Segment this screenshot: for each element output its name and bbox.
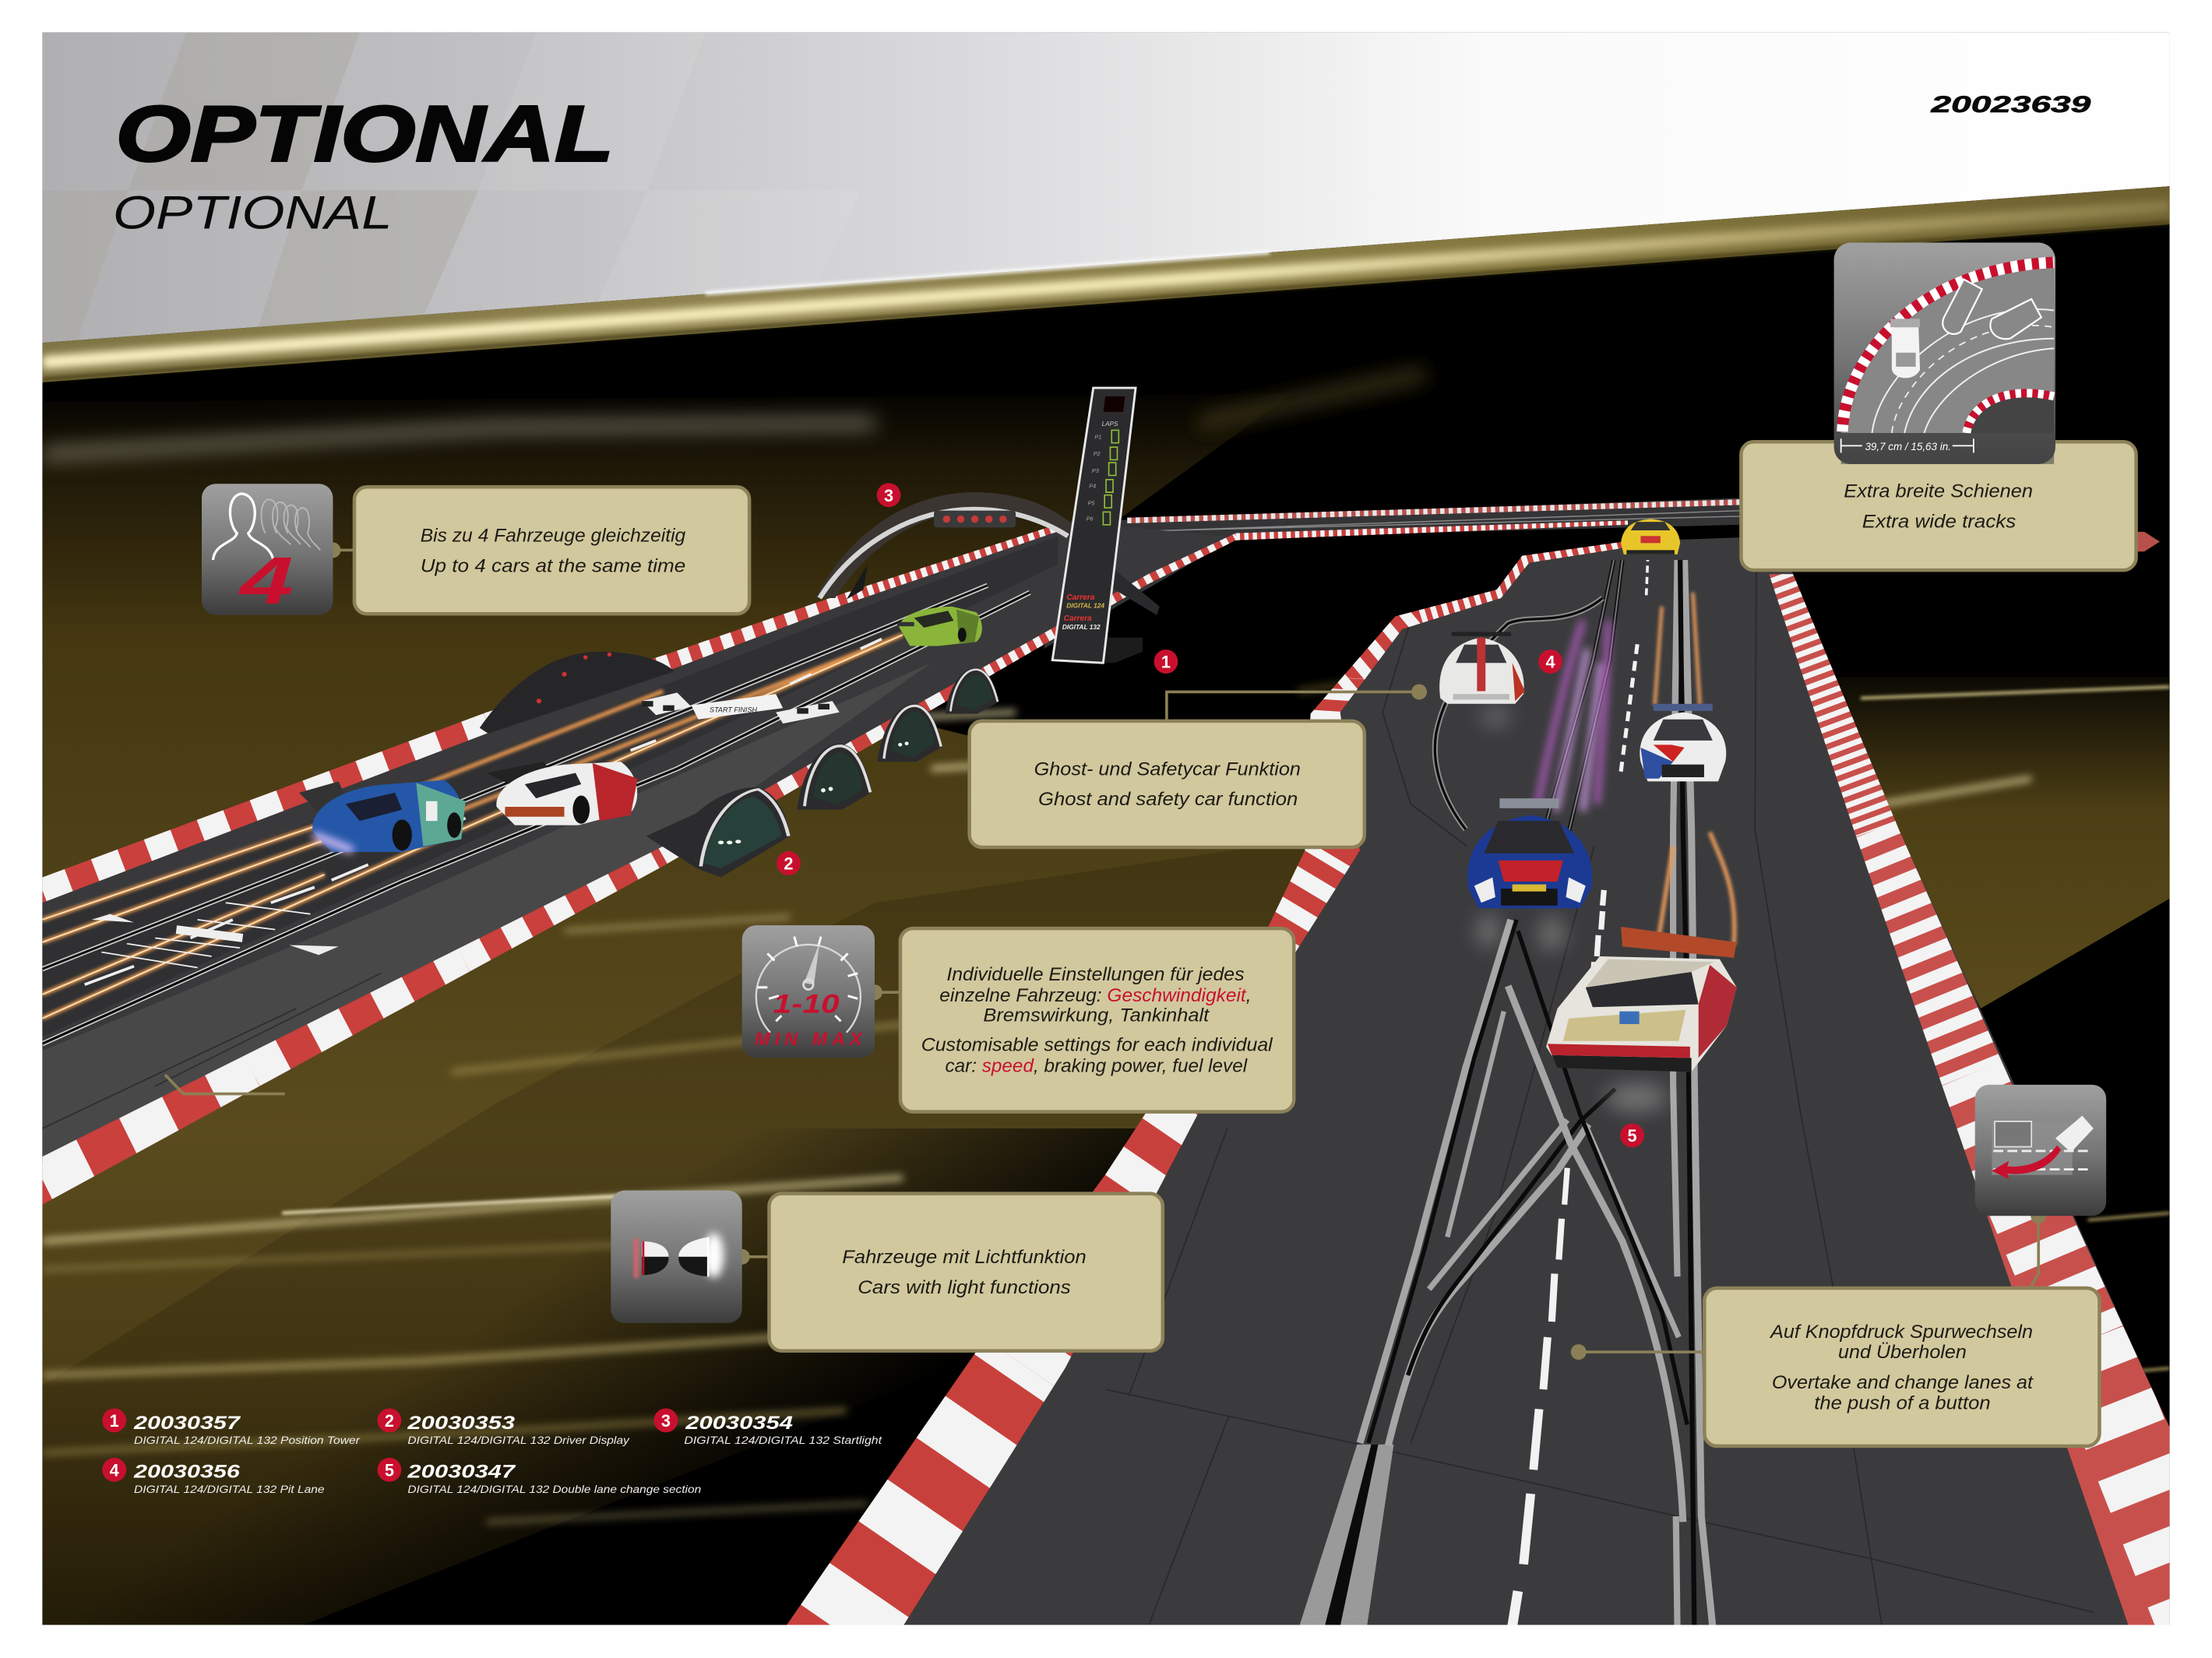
number badges — [777, 483, 1644, 1147]
legend item 4: 20030356 — [133, 1461, 240, 1482]
position tower: P3 — [1092, 467, 1099, 474]
legend item 4 — [102, 1458, 325, 1495]
right track right kerb — [1749, 564, 2201, 1636]
legend: part numbers — [102, 1409, 882, 1495]
icon: wide tracks: 39,7 cm / 15,63 in. — [1865, 441, 1951, 452]
car: red white — [487, 762, 638, 825]
bronze background right — [1819, 677, 2170, 1009]
icon: gauge: 1-10 — [773, 989, 840, 1019]
legend item 1 — [102, 1409, 361, 1446]
callout: up to 4 cars: Up to 4 cars at the same time — [421, 555, 685, 576]
car: yellow — [1621, 519, 1680, 554]
callout: individual settings: Customisable settings for each individual — [921, 1034, 1273, 1055]
icon: wide tracks — [1834, 243, 2055, 464]
car: ferrari — [1546, 927, 1737, 1072]
white direction arrows — [92, 914, 339, 955]
icon: lane change — [1975, 1085, 2106, 1216]
callout: extra wide tracks — [1741, 442, 2136, 570]
callout: lane change: Auf Knopfdruck Spurwechseln — [1769, 1322, 2033, 1343]
car: blue audi — [1467, 798, 1592, 908]
display 1 — [646, 787, 790, 878]
connector: gauge icon — [867, 984, 900, 1000]
icon: four drivers: 4 — [238, 544, 294, 618]
legend item 3: 3 — [661, 1411, 671, 1431]
badge 4 — [1538, 649, 1562, 674]
icon: gauge: MIN MAX — [755, 1029, 863, 1049]
dark arch — [480, 652, 675, 734]
right track surface — [903, 536, 2170, 1626]
callout: individual settings: Bremswirkung, Tankinhalt — [983, 1005, 1210, 1026]
callout: lane change: the push of a button — [1814, 1392, 1991, 1413]
display 4 — [946, 668, 999, 713]
callout: lane change — [1704, 1288, 2099, 1446]
position tower: P1 — [1095, 433, 1101, 440]
chequered start finish line: START FINISH — [710, 706, 757, 714]
subtitle: OPTIONAL — [113, 185, 393, 238]
connector: ghost callout — [1167, 684, 1427, 720]
callout: lane change: und Überholen — [1838, 1342, 1967, 1363]
car: blue renault — [299, 780, 466, 852]
legend item 3 — [654, 1409, 882, 1446]
connector: lane change section — [1571, 1344, 1704, 1360]
position tower: Carrera — [1064, 614, 1092, 623]
legend item 4: DIGITAL 124/DIGITAL 132 Pit Lane — [134, 1484, 325, 1495]
icon: lights — [611, 1191, 742, 1323]
legend item 2: 2 — [385, 1411, 394, 1431]
driver displays — [646, 668, 999, 878]
bronze background left — [42, 393, 1411, 1625]
callout: up to 4 cars — [354, 487, 749, 614]
badge 2: 2 — [784, 854, 794, 874]
car: green — [897, 607, 982, 646]
badge 5: 5 — [1628, 1126, 1637, 1146]
badge 1: 1 — [1161, 653, 1171, 672]
legend item 2: 20030353 — [407, 1413, 516, 1434]
left track surface — [42, 522, 1236, 1163]
car: white porsche — [1439, 632, 1525, 704]
position tower: P6 — [1087, 515, 1094, 522]
legend item 1: 20030357 — [133, 1413, 241, 1434]
callout: lane change: Overtake and change lanes at — [1772, 1372, 2034, 1393]
legend item 1: 1 — [110, 1411, 119, 1431]
position tower — [1052, 388, 1160, 663]
callout: light functions — [769, 1194, 1163, 1351]
callout: ghost and safety car — [970, 721, 1365, 847]
position tower: Carrera — [1066, 593, 1095, 602]
article number: 20023639 — [1930, 92, 2091, 118]
position tower: P2 — [1094, 450, 1101, 457]
left track lower kerb — [42, 520, 1628, 1204]
badge 3: 3 — [884, 486, 893, 505]
track lanes and lane change section — [1299, 560, 1713, 1626]
callout: up to 4 cars: Bis zu 4 Fahrzeuge gleichzeitig — [421, 526, 686, 547]
gold band — [42, 186, 2170, 382]
left track lane glow — [42, 635, 903, 1019]
legend item 2 — [378, 1409, 630, 1446]
icon: gauge — [742, 925, 875, 1058]
position tower: P5 — [1087, 499, 1095, 506]
callout: extra wide tracks: Extra breite Schienen — [1844, 481, 2033, 502]
title: OPTIONAL — [116, 90, 614, 178]
car light trails — [1537, 593, 1735, 945]
callout: ghost and safety car: Ghost- und Safetycar Funktion — [1034, 759, 1301, 780]
display 3 — [878, 704, 942, 762]
track glow spots — [1477, 708, 1668, 1111]
left track slots — [42, 586, 1030, 1044]
position tower: DIGITAL 132 — [1062, 623, 1101, 631]
legend item 3: 20030354 — [685, 1413, 793, 1434]
car: bmw — [1640, 704, 1726, 781]
connector: lane change icon — [2030, 1208, 2046, 1288]
callout: individual settings — [900, 928, 1294, 1112]
badge 4: 4 — [1545, 653, 1555, 672]
position tower: DIGITAL 124 — [1066, 602, 1104, 610]
legend item 3: DIGITAL 124/DIGITAL 132 Startlight — [684, 1434, 882, 1446]
position tower: P4 — [1089, 483, 1096, 490]
badge 3 — [877, 483, 900, 507]
display 2 — [797, 744, 872, 810]
callout: individual settings: car: speed, braking power, fuel level — [946, 1056, 1248, 1077]
callout: ghost and safety car: Ghost and safety car function — [1038, 789, 1298, 810]
legend item 4: 4 — [110, 1460, 119, 1480]
left stray connector — [165, 1075, 285, 1094]
legend item 5: 20030347 — [407, 1461, 516, 1482]
callout: individual settings: Individuelle Einstellungen für jedes — [946, 964, 1245, 985]
icon: four drivers — [202, 484, 333, 618]
header panel — [42, 33, 2170, 343]
startlight gantry — [815, 492, 1078, 600]
badge 1 — [1154, 649, 1178, 674]
legend item 5: 5 — [385, 1460, 394, 1480]
light streaks — [42, 374, 2170, 1522]
callout: extra wide tracks: Extra wide tracks — [1862, 511, 2016, 532]
centre line dashes — [1513, 560, 1648, 1626]
legend item 1: DIGITAL 124/DIGITAL 132 Position Tower — [134, 1434, 361, 1446]
callout: individual settings: einzelne Fahrzeug: Geschwindigkeit, — [939, 985, 1252, 1006]
legend item 5: DIGITAL 124/DIGITAL 132 Double lane change section — [407, 1484, 702, 1495]
left track upper kerb — [42, 528, 1056, 903]
callout: light functions: Cars with light functions — [858, 1277, 1071, 1298]
chequered start finish line — [642, 692, 840, 723]
far straight track — [1044, 498, 2160, 649]
connector: light icon — [734, 1249, 769, 1265]
connector: people icon to callout — [325, 542, 354, 558]
position tower: LAPS — [1102, 421, 1118, 428]
legend item 2: DIGITAL 124/DIGITAL 132 Driver Display — [407, 1434, 630, 1446]
badge 5 — [1620, 1124, 1644, 1147]
right track left kerb — [787, 542, 1622, 1625]
legend item 5 — [378, 1458, 702, 1495]
badge 2 — [777, 851, 801, 875]
callout: light functions: Fahrzeuge mit Lichtfunktion — [842, 1247, 1087, 1268]
